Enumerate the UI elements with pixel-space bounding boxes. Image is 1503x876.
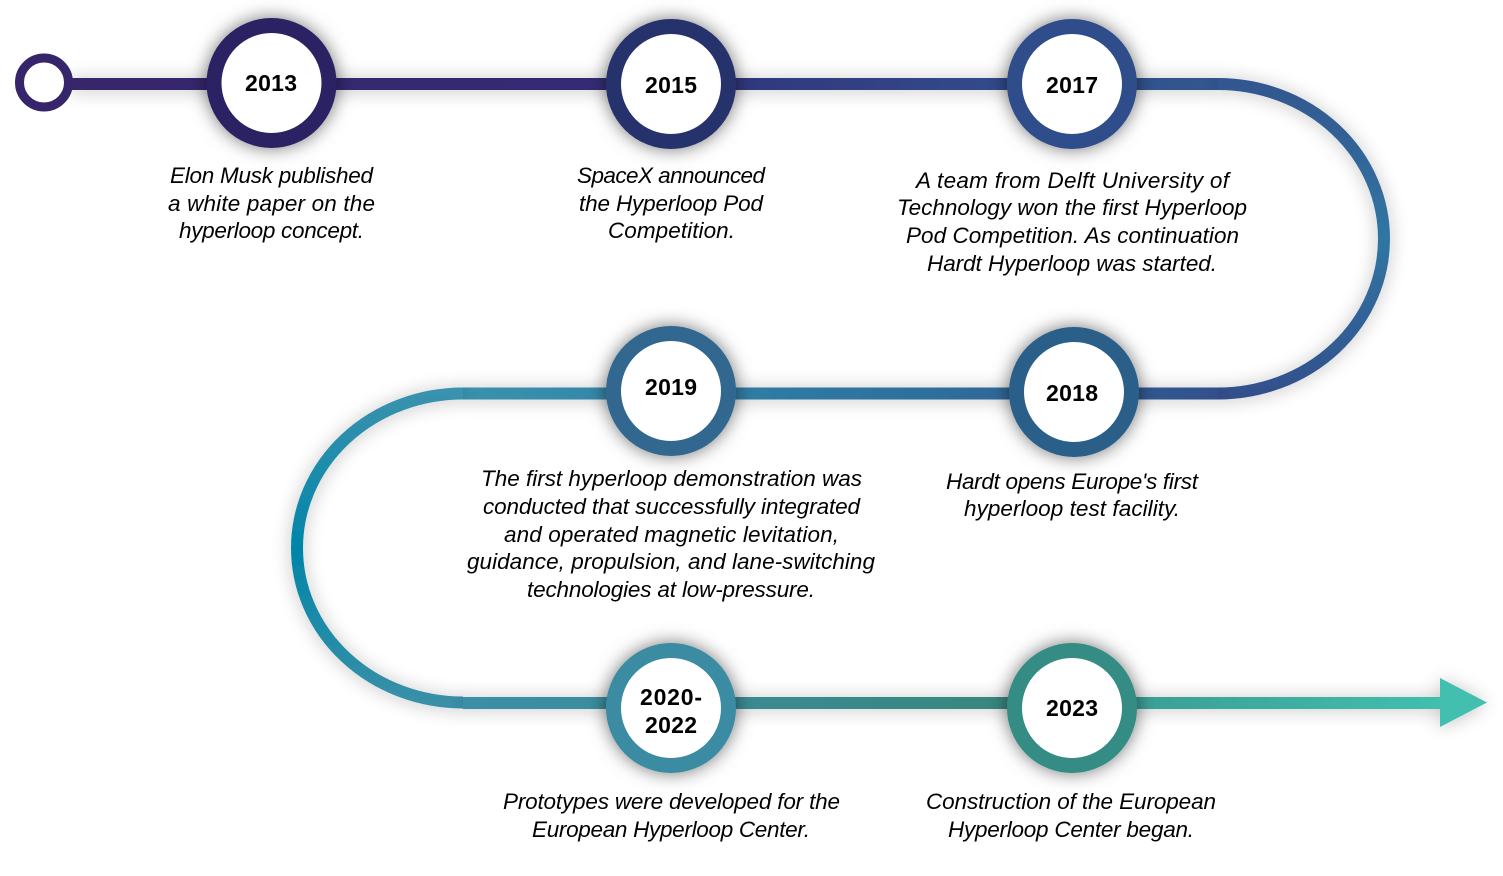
text: 2023 description: Hyperloop Center began. <box>948 817 1194 842</box>
text: 2023 description <box>926 789 1216 842</box>
milestone 2019 <box>614 334 728 448</box>
text: 2013 description: Elon Musk published <box>170 163 374 188</box>
text: 2020-2022 description: European Hyperloop Center. <box>532 817 810 842</box>
text: 2015 description <box>577 163 766 243</box>
text: 2019 description: and operated magnetic levitation, <box>504 522 839 547</box>
text: 2013 description: hyperloop concept. <box>179 218 364 243</box>
text: 2017 description: Technology won the first Hyperloop <box>897 195 1247 220</box>
text: 2019 description: The first hyperloop demonstration was <box>481 466 862 491</box>
text: 2013 description: a white paper on the <box>168 191 375 216</box>
text: 2019 description <box>467 466 875 602</box>
milestone 2018: 2018 <box>1046 380 1098 406</box>
start marker ring <box>20 58 68 107</box>
path: top line from start to first bend <box>70 78 1218 90</box>
text: 2020-2022 description: Prototypes were developed for the <box>503 789 840 814</box>
text: 2019 description: technologies at low-pressure. <box>527 577 815 602</box>
text: 2017 description: Pod Competition. As continuation <box>906 223 1239 248</box>
milestone 2020-2022: 2020- <box>640 684 702 710</box>
milestone 2023 <box>1014 650 1130 766</box>
text: 2017 description <box>897 168 1247 276</box>
milestone 2020-2022 <box>614 650 728 766</box>
text: 2013 description <box>168 163 375 243</box>
text: 2015 description: the Hyperloop Pod <box>579 191 764 216</box>
text: 2017 description: A team from Delft University of <box>914 168 1232 193</box>
text: 2015 description: Competition. <box>608 218 735 243</box>
path: right curve <box>1218 84 1384 394</box>
text: 2020-2022 description <box>503 789 840 842</box>
text: 2015 description: SpaceX announced <box>577 163 766 188</box>
path: middle line <box>463 388 1218 400</box>
milestone 2019: 2019 <box>645 374 697 400</box>
text: 2019 description: conducted that successfully integrated <box>483 494 861 519</box>
text: 2023 description: Construction of the European <box>926 789 1216 814</box>
text: 2018 description: Hardt opens Europe's first <box>946 469 1200 494</box>
text: 2017 description: Hardt Hyperloop was started. <box>927 251 1217 276</box>
path: left curve <box>297 394 463 702</box>
milestone 2023: 2023 <box>1046 695 1098 721</box>
text: 2018 description <box>946 469 1200 521</box>
milestone 2015: 2015 <box>645 72 697 98</box>
milestone 2015 <box>614 26 728 142</box>
milestone 2013 <box>214 26 329 140</box>
text: 2018 description: hyperloop test facility. <box>964 496 1180 521</box>
text: 2019 description: guidance, propulsion, and lane-switching <box>467 549 875 574</box>
milestone 2018 <box>1016 334 1132 450</box>
milestone 2017 <box>1014 26 1130 142</box>
milestone 2013: 2013 <box>245 70 297 96</box>
arrow: bottom line with arrowhead <box>463 678 1487 727</box>
milestone 2020-2022: 2022 <box>645 712 697 738</box>
milestone 2017: 2017 <box>1046 72 1098 98</box>
